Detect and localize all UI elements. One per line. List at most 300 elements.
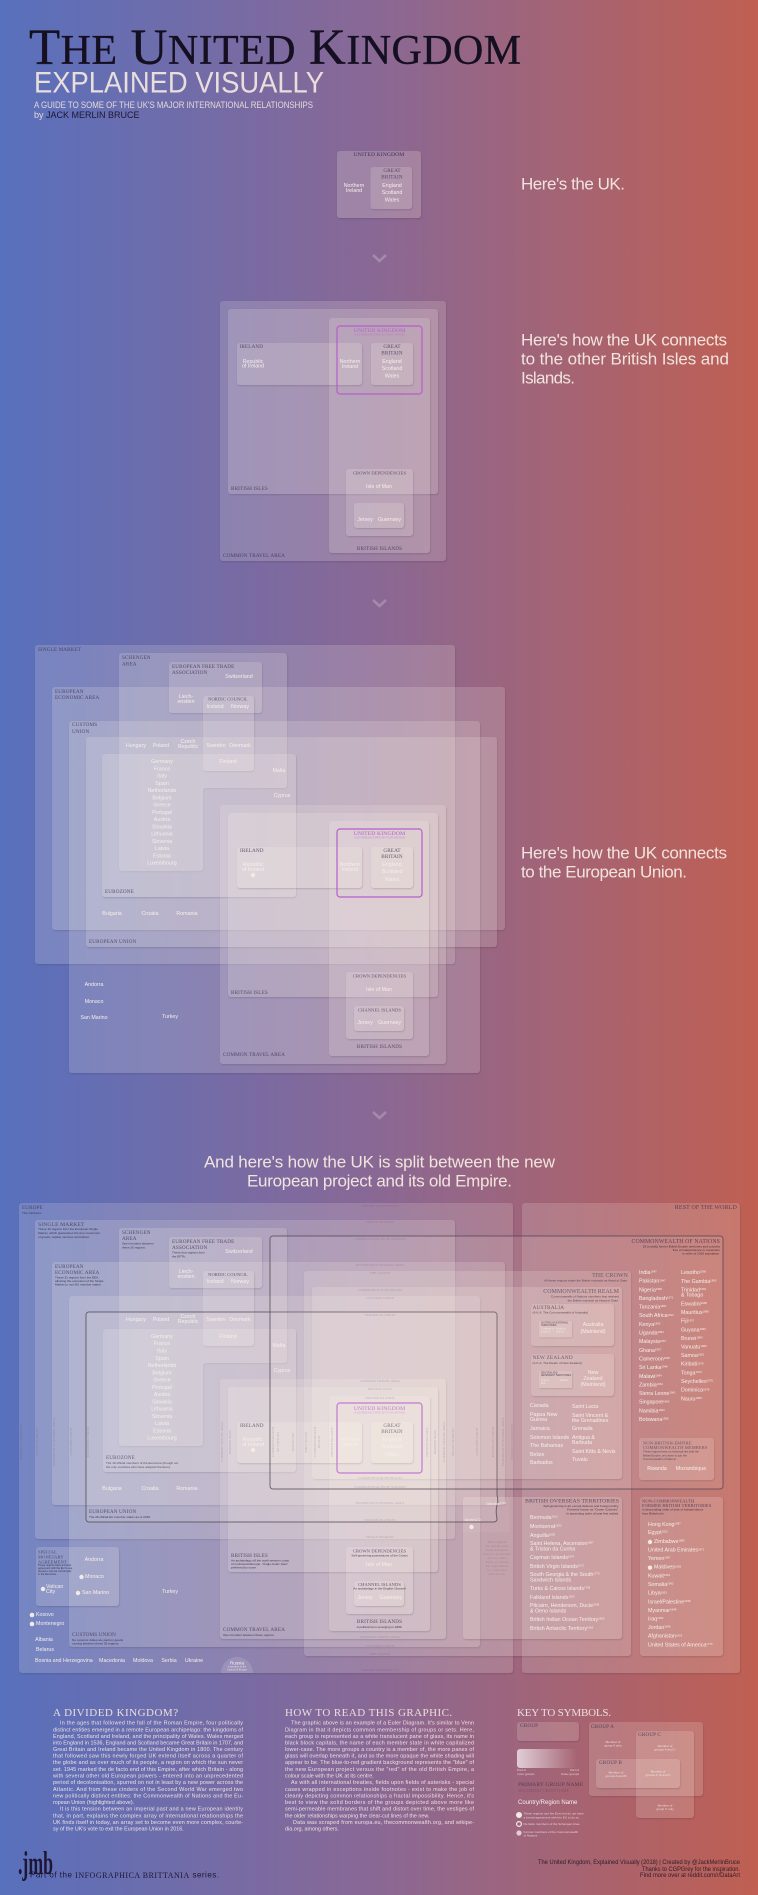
panel: Eurozone	[103, 1329, 296, 1472]
key: name styles: PRIMARY GROUP NAME	[518, 1782, 584, 1788]
panel: Eurozone: the only countries who have adopted the Euro).	[106, 1465, 171, 1469]
text block: How to read this graphic: best to view the solid borders of the groups depicted above more like	[285, 1800, 474, 1806]
European country labels: Gibraltar	[486, 1502, 500, 1506]
logo and series line: Part of the INFOGRAPHICA BRITTANIA series.	[30, 1870, 219, 1880]
panel: United Kingdom highlight	[337, 829, 422, 897]
faint horizontal pane labels: BRITISH ISLANDS	[365, 1396, 395, 1400]
country labels: Republic	[178, 744, 199, 750]
panel: Australia: Cocos Is.	[541, 1332, 551, 1334]
faint horizontal pane labels: EUROPEAN UNION	[365, 1518, 396, 1522]
text: here's the UK: Here's the UK.	[521, 174, 625, 194]
country labels: Poland	[153, 743, 169, 749]
panel: Great Britain: Wales	[385, 374, 400, 380]
panel: Schengen Area: these 26 regions.	[122, 1246, 146, 1250]
panel: Single Market	[35, 645, 455, 964]
panel: British Isles: An archipelago off the north-western coast	[231, 1558, 289, 1562]
panel: Great Britain: England	[382, 183, 402, 189]
Non-Commonwealth former territories list: United States of America	[648, 1642, 706, 1648]
text block: How to read this graphic: Data was scraped from europa.eu, thecommonwealth.org, and wikipe-	[293, 1820, 474, 1826]
faint horizontal pane labels: CUSTOMS UNION	[366, 1296, 395, 1300]
panel: European Economic Area: These 31 regions form the EEA,	[55, 1276, 99, 1280]
panel: Gibraltar and Akrotiri inset: EU negotiations	[486, 1564, 509, 1568]
country labels: Hungary	[126, 743, 146, 749]
text block: A Divided Kingdom?: period of decolonisation, spurred on not in least by a new power across the	[53, 1780, 243, 1786]
panel: United Kingdom highlight	[337, 326, 422, 394]
text block: How to read this graphic: Diagram in that it depicts common membership of groups or sets. Here,	[285, 1727, 474, 1733]
panel: Single Market: of goods, capital, services and labour.	[38, 1235, 90, 1239]
Commonwealth realm labels: New	[588, 1370, 598, 1376]
country labels: Italy	[157, 774, 167, 780]
Commonwealth of Nations member list: 1947	[659, 1278, 666, 1282]
European country labels: Sweden	[206, 1317, 226, 1323]
Commonwealth of Nations member list: Malaysia	[639, 1339, 660, 1345]
outline: Commonwealth of Nations: free of independence in expansion	[673, 1248, 720, 1252]
panel: Australia: TERRITORIES	[541, 1325, 557, 1327]
European country labels: Turkey	[162, 1589, 178, 1595]
panel: Special Monetary Agreement	[36, 1547, 119, 1606]
Non-Commonwealth former territories list: Libya	[648, 1591, 661, 1597]
text block: How to read this graphic: black block capitals, the name of each member state in white capitalized	[285, 1740, 474, 1746]
Commonwealth of Nations member list: Tonga	[681, 1370, 695, 1376]
panel: European Economic Area: allowing the extension of the Single	[55, 1279, 104, 1283]
country labels: Spain	[155, 781, 169, 787]
Commonwealth of Nations member list: Malawi	[639, 1374, 655, 1380]
panel: European Union: EUROPEAN UNION	[89, 939, 136, 945]
European country labels: Kosovo	[36, 1612, 54, 1618]
Commonwealth of Nations member list: 1966	[700, 1270, 707, 1274]
Commonwealth realm labels	[530, 1322, 616, 1466]
panel: Crown Dependencies: Self-governing possessions of the Crown	[351, 1554, 408, 1558]
panel: Nordic Council	[203, 1271, 254, 1346]
panel: European Free Trade Association: These four regions form	[172, 1251, 205, 1255]
panel: Nordic Council	[203, 696, 254, 771]
British Overseas Territories list: 1838	[593, 1603, 600, 1607]
panel: Non-British-Empire Commonwealth members: COMMONWEALTH MEMBERS	[643, 1445, 708, 1450]
faint horizontal pane labels: COMMONWEALTH OF NATIONS	[354, 1485, 406, 1489]
British Overseas Territories list: & Tristan da Cunha	[530, 1546, 575, 1552]
panel: British Isles	[228, 309, 438, 494]
Commonwealth realm labels: (Mainland)	[580, 1329, 606, 1335]
panel: Schengen Area	[119, 653, 287, 871]
country labels: Austria	[154, 817, 170, 823]
European country labels: Serbia	[161, 1658, 177, 1664]
country labels: Croatia	[141, 911, 159, 917]
text block: A Divided Kingdom?: distinct entities emerged in a remote European archipelago: the kingdoms of	[53, 1727, 244, 1733]
Non-Commonwealth former territories list: 1922	[662, 1530, 668, 1534]
Commonwealth of Nations member list: 1966	[662, 1417, 669, 1421]
Commonwealth of Nations member list: 1962	[658, 1330, 664, 1334]
panel: European Free Trade Association: EUROPEAN FREE TRADE	[172, 1239, 234, 1245]
panel: United Kingdom	[337, 151, 421, 218]
Commonwealth of Nations member list: 1962	[700, 1287, 707, 1291]
Commonwealth of Nations member list: 1971	[667, 1296, 674, 1300]
key: Venn example: groups A and B	[606, 1774, 626, 1778]
country labels: Norway	[231, 704, 249, 710]
faint vertical pane labels: THE CROWN	[304, 1431, 308, 1452]
panel: Eurozone: EUROZONE	[105, 889, 134, 895]
European country labels: enstien	[177, 1274, 195, 1280]
panel: European Free Trade Association	[169, 1237, 262, 1288]
panel: Common Travel Area	[220, 805, 446, 1064]
panel: Schengen Area: AREA	[122, 1236, 137, 1242]
country labels: Netherlands	[148, 788, 177, 794]
heading: section 4: And here's how the UK is split between the new	[204, 1152, 556, 1172]
Commonwealth of Nations member list: Sri Lanka	[639, 1365, 661, 1371]
panel: The Crown: All these regions retain the British monarch as Head of State.	[544, 1278, 628, 1282]
Commonwealth of Nations member list: Tanzania	[639, 1305, 660, 1311]
European country labels: Italy	[157, 1348, 167, 1354]
panel: The Crown	[304, 1271, 631, 1656]
panel: Non-Commonwealth former British territories	[640, 1497, 723, 1656]
key to symbols	[516, 1707, 703, 1838]
Commonwealth realm labels: the Grenadines	[572, 1418, 609, 1424]
European country labels: Andorra	[85, 1557, 103, 1563]
panel: Gibraltar and Akrotiri inset: in the European	[486, 1548, 508, 1552]
panel: United Kingdom: Northern	[344, 183, 364, 189]
Commonwealth of Nations member list: Vanuatu	[681, 1344, 700, 1350]
Commonwealth realm labels: Belize	[530, 1452, 544, 1458]
panel: United Kingdom highlight: Ireland	[342, 364, 358, 370]
shape: Russia: Council of Europe	[227, 1668, 248, 1672]
Non-Commonwealth former territories list: Iraq	[648, 1616, 657, 1622]
European country labels: Estonia	[153, 1428, 171, 1434]
panel: European Free Trade Association	[169, 662, 262, 713]
European country labels: Wales	[385, 1452, 400, 1458]
faint horizontal pane labels: EUROPE (CONTINENT)	[362, 1204, 399, 1208]
text block: How to read this graphic: dia.org, among others.	[285, 1827, 339, 1833]
faint vertical pane labels: BRITISH ISLES	[433, 1430, 437, 1454]
key: Venn example: groups A and C	[654, 1748, 676, 1752]
key: Venn example: Member of	[658, 1744, 673, 1748]
panel: European Economic Area: Market to non-EU member states.	[55, 1283, 102, 1287]
heading: section 4: European project and its old Empire.	[247, 1172, 512, 1190]
European country labels: Poland	[153, 1317, 169, 1323]
Commonwealth of Nations member list: 1980	[700, 1344, 707, 1348]
Commonwealth of Nations member list: 1966	[700, 1327, 706, 1331]
panel: Great Britain: GREAT	[383, 168, 401, 174]
Commonwealth of Nations member list: Samoa	[681, 1353, 698, 1359]
European country labels: Scotland	[382, 1444, 402, 1450]
panel: Crown Dependencies: CROWN DEPENDENCIES	[353, 1548, 406, 1554]
Commonwealth realm labels: Jamaica	[530, 1426, 550, 1432]
European country labels: 1704	[500, 1501, 506, 1505]
text block: A Divided Kingdom?: Great Britain and Ireland became the United Kingdom in 1800. The century	[53, 1747, 243, 1753]
faint vertical pane labels: EUROPE (CONTINENT)	[510, 1423, 514, 1460]
Commonwealth of Nations member list: Fiji	[681, 1319, 688, 1325]
text: EU caption	[521, 844, 727, 882]
key: Venn example: groups A, B and C	[645, 1773, 671, 1777]
European country labels: Luxembourg	[147, 1436, 177, 1442]
key: group pane	[517, 1722, 579, 1741]
Non-Commonwealth former territories list	[648, 1522, 713, 1648]
Commonwealth of Nations member list: 1970	[695, 1370, 702, 1374]
key: Venn example: Member of	[606, 1740, 621, 1744]
panel: New Zealand: Tokelau	[560, 1380, 569, 1382]
panel: Special Monetary Agreement: agreement with the EU to use	[38, 1566, 73, 1570]
heading: section 4	[204, 1152, 556, 1190]
British Overseas Territories list: Saint Helena, Ascension	[530, 1541, 587, 1547]
text block: A Divided Kingdom?: new politically distinct entities: the Commonwealth of Nations and the Eu-	[53, 1793, 243, 1799]
text block: How to read this graphic: cleanly depicting common relationships a fractal impossibility. Hence, it's	[285, 1793, 474, 1799]
panel: Customs Union: moving between these 33 regions.	[72, 1642, 119, 1646]
Commonwealth of Nations member list: The Gambia	[681, 1279, 710, 1285]
text block: A Divided Kingdom?: sy of the UK's vote to exit the European Union in 2016.	[53, 1827, 184, 1833]
European country labels: Slovakia	[152, 1399, 172, 1405]
text block: How to read this graphic: appear to be. The blue-to-red gradient background represents the "blue" of	[285, 1760, 474, 1766]
faint vertical pane labels: COMMONWEALTH	[271, 1426, 275, 1457]
panel: Great Britain: GREAT	[383, 344, 401, 350]
panel: Gibraltar and Akrotiri inset: in cooperation	[487, 1568, 507, 1572]
country labels: Portugal	[152, 810, 172, 816]
key: Venn example: group C only	[656, 1807, 674, 1811]
European country labels: Finland	[219, 1334, 237, 1340]
byline: by JACK MERLIN BRUCE	[34, 110, 140, 120]
panel: British Isles	[228, 1387, 438, 1572]
key: name styles: SECONDARY GROUP NAME	[518, 1789, 570, 1793]
panel: Channel Islands	[354, 1006, 404, 1031]
Commonwealth of Nations member list: 1964	[657, 1382, 663, 1386]
panel: Crown Dependencies: CROWN DEPENDENCIES	[353, 470, 406, 476]
European country labels: Liech-	[179, 1269, 193, 1275]
faint vertical pane labels: EUROZONE	[291, 1433, 295, 1451]
country labels: Andorra	[85, 982, 103, 988]
key: Venn example: Member of	[609, 1770, 624, 1774]
European country labels: Malta	[273, 1343, 286, 1349]
text block: How to read this graphic: the new European project versus the "red" of the old British Empire, a	[285, 1767, 474, 1773]
Non-Commonwealth former territories list: United Arab Emirates	[648, 1548, 698, 1554]
panel: Nordic Council: NORDIC COUNCIL	[208, 696, 248, 702]
Commonwealth of Nations member list: 1990	[658, 1408, 665, 1412]
panel: Australia	[531, 1304, 614, 1346]
country labels: Guernsey	[378, 1020, 401, 1026]
country labels: Monaco	[85, 999, 103, 1005]
Non-Commonwealth former territories list: 1919	[676, 1633, 683, 1637]
faint vertical pane labels: CUSTOMS UNION	[69, 1427, 73, 1456]
text block: A Divided Kingdom?: the globe and as over much of its people, a region on which the sun never	[53, 1760, 243, 1766]
European country labels: Monaco	[85, 1574, 104, 1580]
faint vertical pane labels: SINGLE MARKET	[451, 1427, 455, 1456]
panel: Common Travel Area: COMMON TRAVEL AREA	[223, 1627, 285, 1633]
Non-Commonwealth former territories list: Maldives	[654, 1565, 675, 1571]
British Overseas Territories list: Anguilla	[530, 1533, 549, 1539]
British Overseas Territories list: Turks & Caicos Islands	[530, 1586, 584, 1592]
faint vertical pane labels: COMMON TRAVEL AREA	[442, 1421, 446, 1462]
country labels: France	[154, 766, 170, 772]
text: EU caption: Here's how the UK connects	[521, 844, 727, 862]
panel: Channel Islands	[354, 503, 404, 528]
panel: Non-British-Empire Commonwealth members: British Empire, yet chose to join the	[643, 1453, 687, 1457]
shape: Russia	[221, 1657, 253, 1673]
Commonwealth of Nations member list: 1962	[698, 1353, 704, 1357]
text block: A Divided Kingdom?: into England in 1536, England and Scotland became Great Britain in 1707, and	[53, 1740, 243, 1746]
country labels: Bulgaria	[102, 911, 122, 917]
Commonwealth of Nations member list: 1965	[710, 1279, 717, 1283]
panel: Channel Islands	[353, 1581, 406, 1606]
panel: Crown Dependencies	[346, 1547, 413, 1614]
panel: Great Britain	[371, 847, 413, 888]
Commonwealth of Nations member list: Zambia	[639, 1382, 657, 1388]
country labels: Germany	[151, 759, 173, 765]
panel: Great Britain: Scotland	[382, 190, 402, 196]
panel: Customs Union: UNION	[72, 729, 89, 735]
text block: A Divided Kingdom?: Atlantic. And from these cinders of the Second World War emerged two	[53, 1787, 243, 1793]
panel: Special Monetary Agreement: the Euro, but are not formally	[38, 1569, 72, 1573]
credits	[538, 1860, 741, 1879]
panel: Schengen Area: SCHENGEN	[122, 1230, 151, 1236]
Commonwealth realm labels: (Mainland)	[580, 1382, 606, 1388]
British Overseas Territories list: 1965	[598, 1617, 605, 1621]
panel: Channel Islands: Jersey	[357, 517, 373, 523]
panel: Customs Union: CUSTOMS UNION	[72, 1632, 116, 1638]
Commonwealth of Nations member list: Guyana	[681, 1327, 700, 1333]
Commonwealth realm labels: Australia	[583, 1322, 603, 1328]
panel: Special Monetary Agreement: These regions have a formal	[38, 1563, 71, 1567]
Commonwealth of Nations member list: 1947	[650, 1270, 657, 1274]
outline: European Union: The 28 official EU member states as of 2018.	[89, 1515, 151, 1519]
faint vertical pane labels: BRITISH ISLES	[228, 1430, 232, 1454]
text: EU caption: to the European Union.	[521, 862, 687, 882]
panel: Common Travel Area	[220, 1379, 446, 1639]
key: shading gradient	[517, 1749, 579, 1776]
text block: A Divided Kingdom?	[52, 1707, 244, 1833]
panel: Non-Commonwealth former British territories: NON-COMMONWEALTH	[642, 1498, 695, 1504]
outline: European Union: EUROPEAN UNION	[89, 1509, 136, 1515]
panel: Great Britain	[371, 1422, 413, 1463]
country labels: Northern	[340, 862, 360, 868]
European country labels: Norway	[231, 1279, 249, 1285]
Commonwealth realm labels: Tuvalu	[572, 1457, 588, 1463]
Commonwealth of Nations member list: 1979	[697, 1361, 704, 1365]
Non-Commonwealth former territories list: 1960	[667, 1582, 674, 1586]
Commonwealth of Nations member list: Dominica	[681, 1388, 703, 1394]
panel: United Kingdom highlight: A SOVEREIGN STATE OF FOUR NATIONS	[354, 332, 405, 336]
Commonwealth of Nations member list: 1964	[655, 1373, 662, 1377]
country labels: of Ireland	[242, 867, 264, 873]
country labels: Lithuania	[151, 832, 173, 838]
faint horizontal pane labels	[354, 1204, 406, 1672]
panel: European Economic Area: EUROPEAN	[55, 689, 84, 695]
country labels: Scotland	[382, 869, 402, 875]
Commonwealth of Nations member list: 1957	[655, 1347, 662, 1351]
panel: Ireland	[237, 847, 362, 888]
panel: Customs Union: CUSTOMS	[72, 722, 97, 728]
panel: Great Britain: Scotland	[382, 366, 402, 372]
European country labels: Akrotiri & D.	[464, 1518, 482, 1522]
European country labels: San Marino	[82, 1590, 109, 1596]
text block: How to read this graphic: HOW TO READ THIS GRAPHIC.	[285, 1707, 453, 1719]
key: icons: Former members of the Commonwealth	[524, 1830, 578, 1834]
faint horizontal pane labels: THE CROWN	[370, 1271, 391, 1275]
country labels: Estonia	[153, 853, 171, 859]
shape: Russia: A member of the	[228, 1666, 247, 1668]
Commonwealth of Nations member list: Cameroon	[639, 1356, 664, 1362]
panel: New Zealand: NEW ZEALAND	[532, 1355, 573, 1361]
European country labels: Iceland	[206, 1279, 224, 1285]
faint horizontal pane labels: EUROPEAN UNION	[365, 1313, 396, 1317]
European country labels: Greece	[153, 1378, 171, 1384]
Non-Commonwealth former territories list: 1980	[678, 1539, 685, 1543]
Non-Commonwealth former territories list: 1961	[664, 1573, 671, 1577]
panel: The Crown: THE CROWN	[592, 1273, 629, 1279]
panel: Schengen Area	[119, 1228, 287, 1446]
panel: Australia: (A.K.A. The Commonwealth of Australia)	[532, 1310, 588, 1314]
text block: How to read this graphic: lower-case. The more groups a country is a member of, the more panes of	[285, 1747, 474, 1753]
panel: European Economic Area	[52, 687, 505, 930]
Non-Commonwealth former territories list: Yemen	[648, 1556, 664, 1562]
Commonwealth of Nations member list: Namibia	[639, 1408, 658, 1414]
faint vertical pane labels: COMMONWEALTH	[313, 1426, 317, 1457]
key: icons: De facto members of the Schengen Area	[524, 1822, 580, 1826]
Commonwealth of Nations member list: Eswatini	[681, 1301, 701, 1307]
key: shading gradient: fewer groups	[561, 1772, 579, 1776]
Commonwealth of Nations member list	[639, 1270, 717, 1423]
panel: United Kingdom highlight: A SOVEREIGN STATE OF FOUR NATIONS	[354, 836, 405, 840]
key to symbols: KEY TO SYMBOLS.	[517, 1707, 612, 1719]
panel: Gibraltar and Akrotiri inset: These regions	[487, 1540, 507, 1544]
panel: British Isles: preferred by some.	[231, 1566, 257, 1570]
faint horizontal pane labels: EUROPE (CONTINENT)	[362, 1668, 399, 1672]
panel: Great Britain: BRITAIN	[381, 854, 403, 860]
European country labels: Romania	[176, 1486, 198, 1492]
panel: European Free Trade Association: the EFTA.	[172, 1254, 186, 1258]
panel: Common Travel Area: COMMON TRAVEL AREA	[223, 553, 285, 559]
European country labels: Denmark	[229, 1317, 251, 1323]
European country labels: Vatican	[46, 1584, 63, 1590]
Commonwealth of Nations member list: 1961	[669, 1391, 676, 1395]
European country labels: Austria	[154, 1392, 170, 1398]
panel: Channel Islands: Guernsey	[378, 517, 401, 523]
panel: Gibraltar and Akrotiri inset: Union's relationship	[483, 1552, 511, 1556]
panel: Non-British-Empire Commonwealth members: Rwanda	[647, 1466, 667, 1472]
panel: New Zealand	[531, 1354, 614, 1396]
section 3: European Union	[35, 645, 727, 1118]
British Overseas Territories list: 1670	[568, 1555, 575, 1559]
Commonwealth of Nations member list: 1910	[668, 1313, 674, 1317]
panel: Eurozone: EUROZONE	[106, 1455, 135, 1461]
faint horizontal pane labels: EUROPEAN ECONOMIC AREA	[356, 1263, 405, 1267]
British Overseas Territories list: & Oeno Islands	[530, 1608, 567, 1614]
text block: A Divided Kingdom?: set. 1945 marked the de facto end of this Empire, after which Britain - along	[53, 1767, 243, 1773]
faint horizontal pane labels: SINGLE MARKET	[366, 1220, 395, 1224]
panel: Non-British-Empire Commonwealth members	[639, 1438, 714, 1480]
key: Venn example: GROUP B	[599, 1760, 622, 1766]
panel: Customs Union	[69, 1296, 480, 1647]
country labels: Republic	[243, 862, 264, 868]
panel: Single Market: Market, which guarantees the free movement	[38, 1231, 100, 1235]
European country labels: Hungary	[126, 1317, 146, 1323]
Commonwealth of Nations member list: 1960	[664, 1356, 670, 1360]
British Overseas Territories list: Sandwich Islands	[530, 1578, 572, 1584]
Commonwealth realm labels: Saint Vincent &	[572, 1413, 609, 1419]
outline: Commonwealth of Nations: COMMONWEALTH OF NATIONS	[631, 1239, 720, 1245]
key: name styles: Country/Region Name	[518, 1800, 578, 1806]
European country labels: France	[154, 1341, 170, 1347]
text block: How to read this graphic	[285, 1707, 474, 1833]
Non-Commonwealth former territories list: Myanmar	[648, 1608, 670, 1614]
faint horizontal pane labels: COMMONWEALTH REALM	[358, 1288, 403, 1292]
key: icons: a formal agreement with the EU to do so.	[524, 1815, 580, 1819]
Non-Commonwealth former territories list: Hong Kong	[648, 1522, 675, 1528]
text block: How to read this graphic: The graphic above is an example of a Euler Diagram. It's similar to Venn	[291, 1721, 474, 1727]
faint vertical pane labels	[19, 1417, 514, 1466]
European country labels: Portugal	[152, 1385, 172, 1391]
British Overseas Territories list: British Antarctic Territory	[530, 1626, 587, 1632]
panel: Great Britain: Wales	[385, 198, 400, 204]
Commonwealth of Nations member list: & Tobago	[681, 1293, 703, 1299]
key: Venn example: Member of	[651, 1770, 666, 1774]
panel: British Overseas Territories	[463, 1497, 622, 1639]
European country labels: Montenegro	[36, 1621, 64, 1627]
